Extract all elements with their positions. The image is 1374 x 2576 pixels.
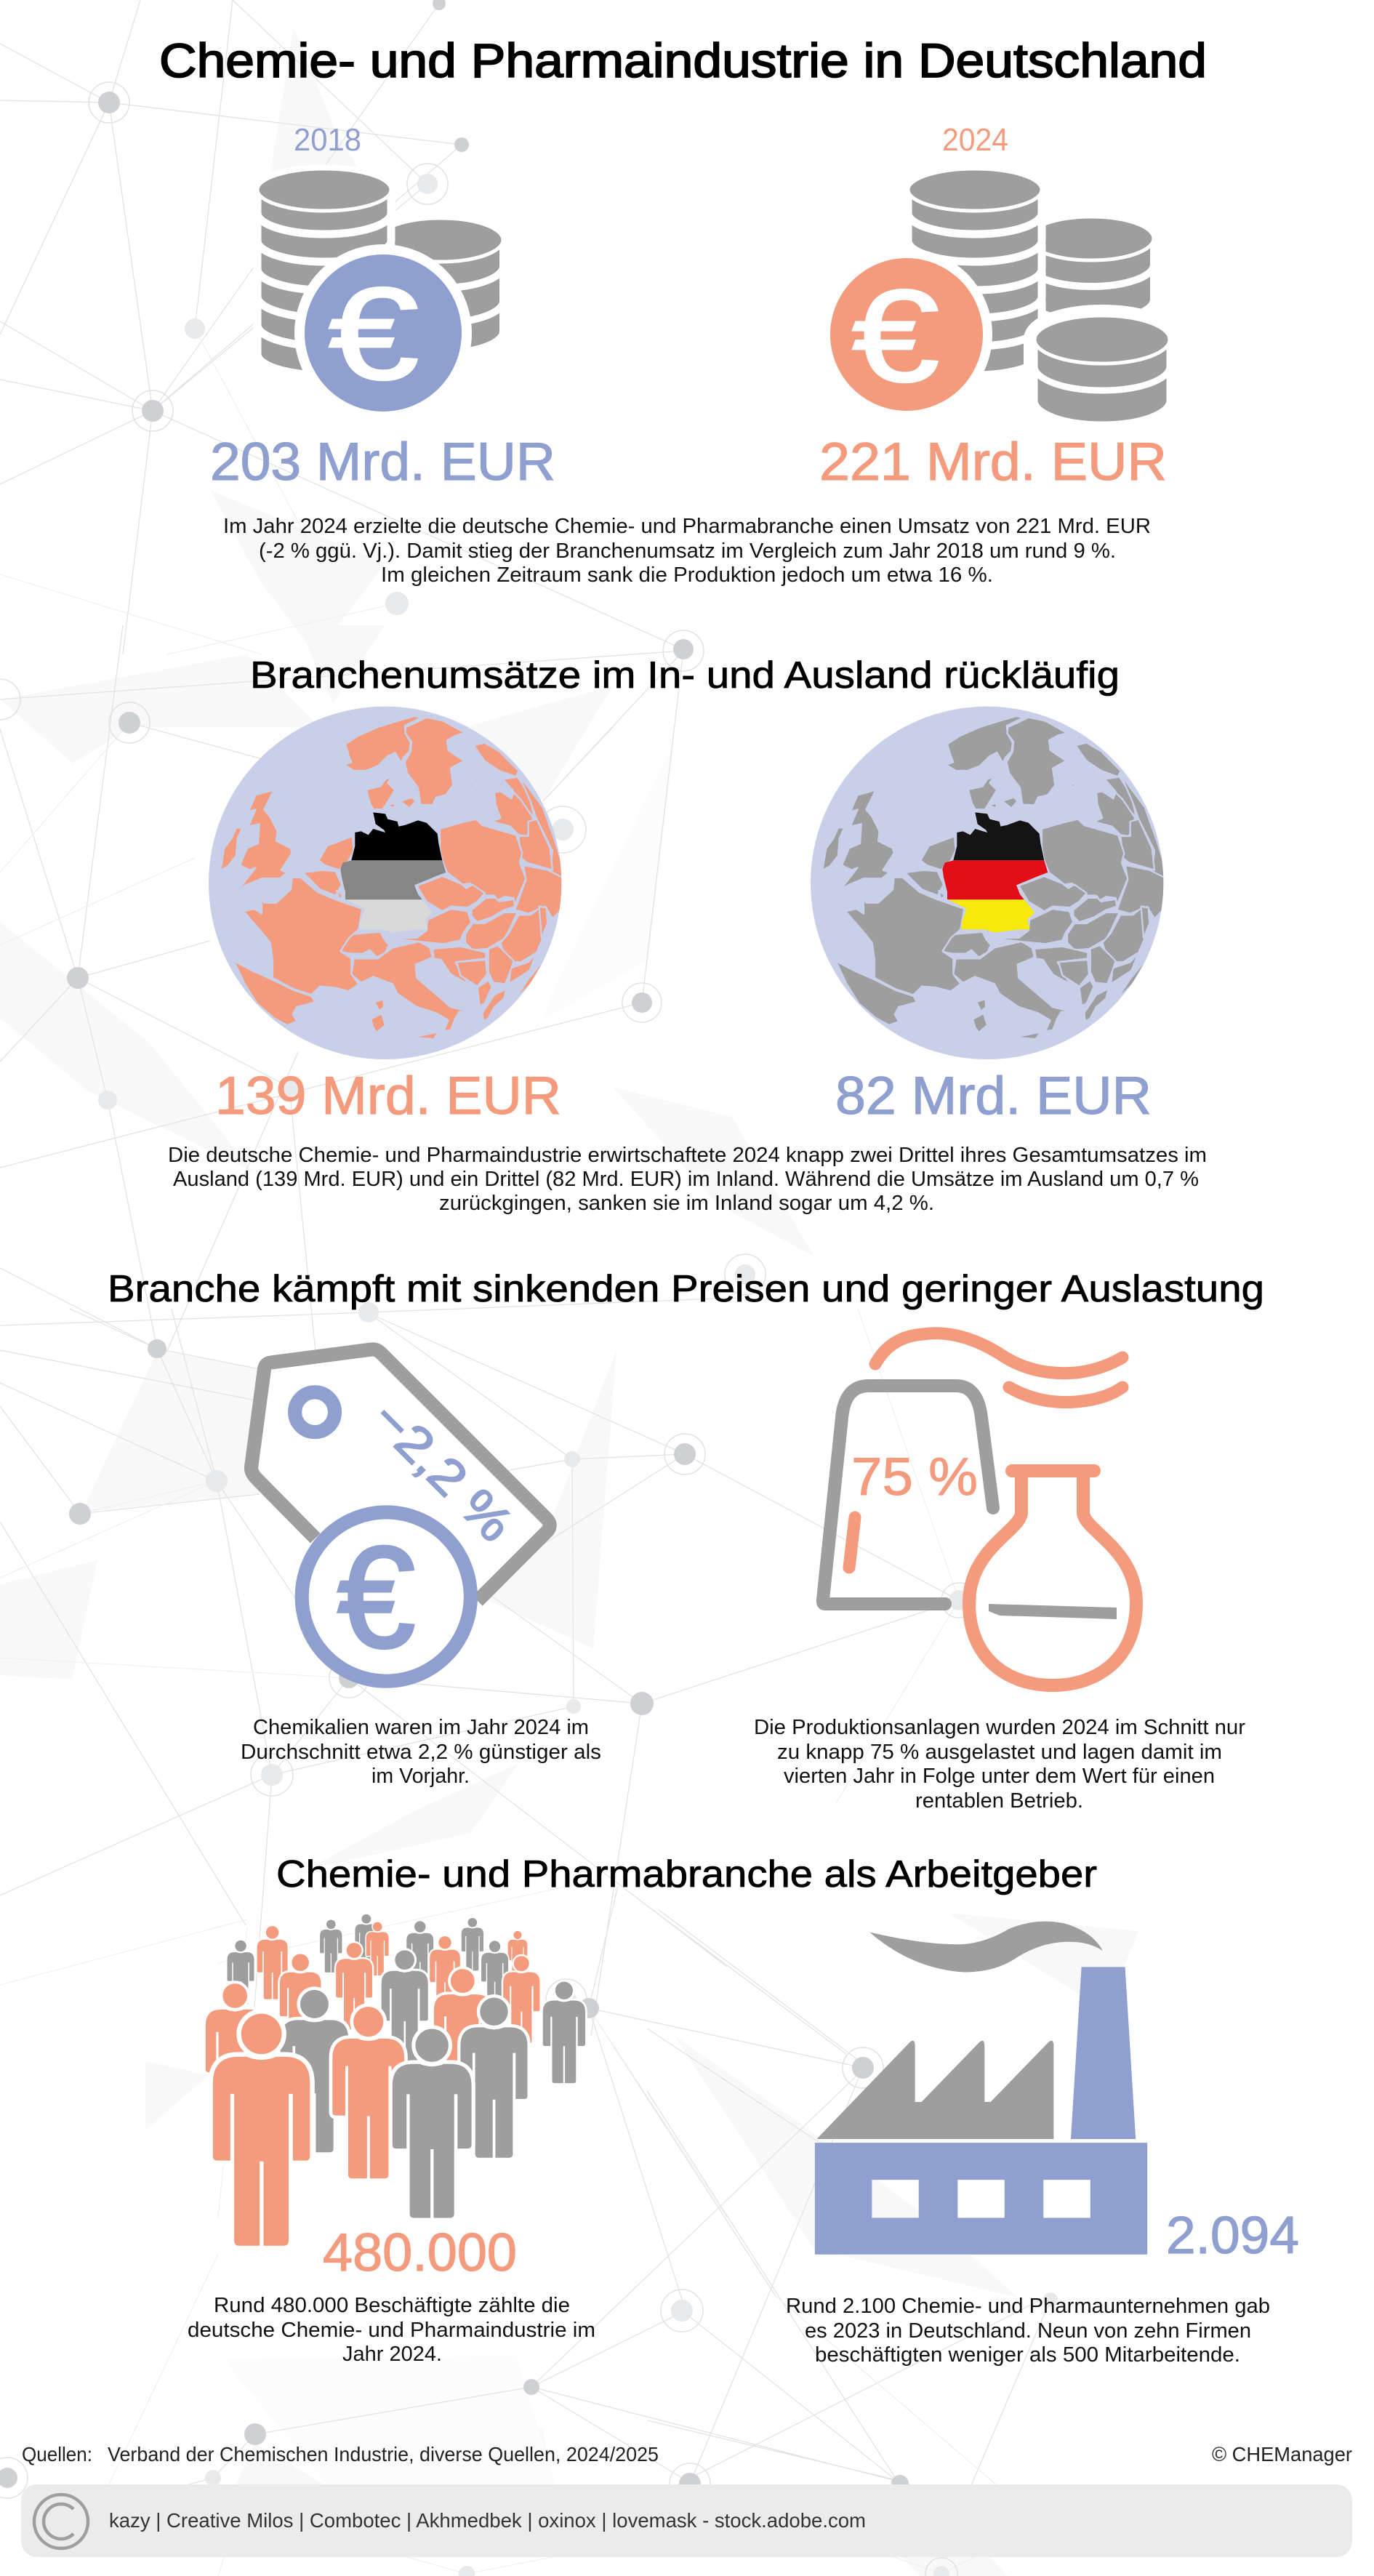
text block: companies: beschäftigten weniger als 500 Mitarbeitende.	[815, 2343, 1240, 2367]
text block: domestic and foreign summary	[168, 1144, 1207, 1215]
icon: euro coin 2024	[821, 249, 992, 420]
icon: large coin stack 2018	[257, 169, 391, 375]
sources: Verband der Chemischen Industrie, diverse Quellen, 2024/2025	[108, 2443, 659, 2465]
text block: revenue summary	[223, 515, 1151, 587]
copyright CHEManager: © CHEManager	[1212, 2443, 1352, 2465]
text block: revenue summary: Im Jahr 2024 erzielte die deutsche Chemie- und Pharmabranche einen Umsatz von 221 Mrd. EUR	[223, 515, 1151, 538]
value 480.000: 480.000	[323, 2223, 517, 2282]
text block: domestic and foreign summary: Die deutsche Chemie- und Pharmaindustrie erwirtschaftete 2024 knapp zwei Drittel ihres Gesamtumsatzes im	[168, 1144, 1207, 1167]
tag hole	[295, 1392, 334, 1432]
text block: domestic and foreign summary: Ausland (139 Mrd. EUR) und ein Drittel (82 Mrd. EUR) im Inland. Während die Umsätze im Ausland um 0,7 %	[173, 1168, 1199, 1191]
flask	[969, 1471, 1136, 1685]
text block: capacity utilisation: rentablen Betrieb.	[915, 1789, 1083, 1813]
sources: Quellen:	[22, 2443, 92, 2465]
building with windows	[815, 2143, 1147, 2255]
map: Germany colour flag	[942, 812, 1048, 933]
chart: globe domestic revenue	[811, 707, 1169, 1059]
tag label: −2,2 %	[361, 1390, 524, 1552]
text block: chemical prices: Chemikalien waren im Jahr 2024 im	[253, 1716, 589, 1739]
text block: capacity utilisation: zu knapp 75 % ausgelastet und lagen damit im	[777, 1741, 1222, 1764]
smoke	[869, 1922, 1103, 1972]
chart: globe foreign revenue	[209, 707, 567, 1059]
credits text: kazy | Creative Milos | Combotec | Akhmedbek | oxinox | lovemask - stock.adobe.com	[109, 2509, 866, 2532]
chimney	[1071, 1967, 1136, 2139]
icon: factory	[815, 1922, 1147, 2255]
icon: small coin stack 2018	[378, 218, 503, 353]
title: Chemie- und Pharmaindustrie in Deutschland	[159, 33, 1207, 87]
text block: companies	[786, 2295, 1270, 2367]
euro coin: €	[337, 1517, 415, 1677]
text block: companies: Rund 2.100 Chemie- und Pharmaunternehmen gab	[786, 2295, 1270, 2318]
icon: large coin stack 2024	[908, 169, 1042, 375]
sawtooth roof	[816, 2041, 1053, 2139]
map: Germany greyscale flag	[340, 812, 446, 932]
text block: employees	[188, 2294, 595, 2366]
text block: chemical prices: Durchschnitt etwa 2,2 % günstiger als	[241, 1741, 601, 1764]
text block: revenue summary: (-2 % ggü. Vj.). Damit stieg der Branchenumsatz im Vergleich zum Jahr 2018 um rund 9 %.	[259, 539, 1116, 563]
icon: front coin stack 2024	[1034, 316, 1170, 425]
image credits bar	[21, 2484, 1352, 2557]
heading: employer: Chemie- und Pharmabranche als Arbeitgeber	[276, 1853, 1097, 1895]
text block: capacity utilisation	[754, 1716, 1246, 1813]
text block: companies: es 2023 in Deutschland. Neun von zehn Firmen	[805, 2319, 1251, 2343]
icon: euro coin 2018: €	[329, 261, 419, 407]
year label 2024: 2024	[942, 122, 1008, 158]
text block: employees: Rund 480.000 Beschäftigte zählte die	[214, 2294, 570, 2317]
steam	[875, 1333, 1122, 1373]
tag outline	[252, 1349, 550, 1601]
heading: prices and capacity: Branche kämpft mit sinkenden Preisen und geringer Auslastung	[108, 1268, 1264, 1310]
fill tick	[849, 1517, 855, 1568]
icon: euro coin 2018	[294, 244, 472, 422]
text block: chemical prices	[241, 1716, 601, 1788]
panel: revenue 2018	[210, 122, 555, 491]
liquid level	[989, 1604, 1117, 1619]
value 2.094: 2.094	[1166, 2207, 1299, 2265]
text block: capacity utilisation: Die Produktionsanlagen wurden 2024 im Schnitt nur	[754, 1716, 1246, 1739]
icon: euro coin 2024: €	[852, 263, 939, 409]
year label 2018: 2018	[294, 122, 361, 158]
value 139 Mrd. EUR: 139 Mrd. EUR	[215, 1067, 561, 1126]
beaker outline	[823, 1386, 993, 1604]
euro coin	[302, 1512, 470, 1681]
icon: small coin stack 2024	[1029, 217, 1154, 352]
text block: chemical prices: im Vorjahr.	[371, 1765, 470, 1788]
text block: employees: Jahr 2024.	[342, 2343, 442, 2366]
text block: capacity utilisation: vierten Jahr in Folge unter dem Wert für einen	[784, 1765, 1215, 1788]
text block: domestic and foreign summary: zurückgingen, sanken sie im Inland sogar um 4,2 %.	[439, 1192, 934, 1215]
icon: crowd of people	[206, 1914, 585, 2246]
icon: plant and flask capacity	[823, 1333, 1136, 1685]
panel: revenue 2024	[819, 122, 1170, 491]
icon: price tag with euro coin	[252, 1349, 550, 1681]
value 203 Mrd. EUR: 203 Mrd. EUR	[210, 433, 555, 491]
value 221 Mrd. EUR: 221 Mrd. EUR	[819, 433, 1167, 491]
heading: domestic and foreign revenue: Branchenumsätze im In- und Ausland rückläufig	[250, 654, 1120, 697]
icon: copyright	[34, 2495, 88, 2548]
value 82 Mrd. EUR: 82 Mrd. EUR	[835, 1067, 1152, 1126]
value 75 %: 75 %	[851, 1448, 978, 1506]
text block: employees: deutsche Chemie- und Pharmaindustrie im	[188, 2319, 595, 2342]
text block: revenue summary: Im gleichen Zeitraum sank die Produktion jedoch um etwa 16 %.	[381, 563, 993, 587]
